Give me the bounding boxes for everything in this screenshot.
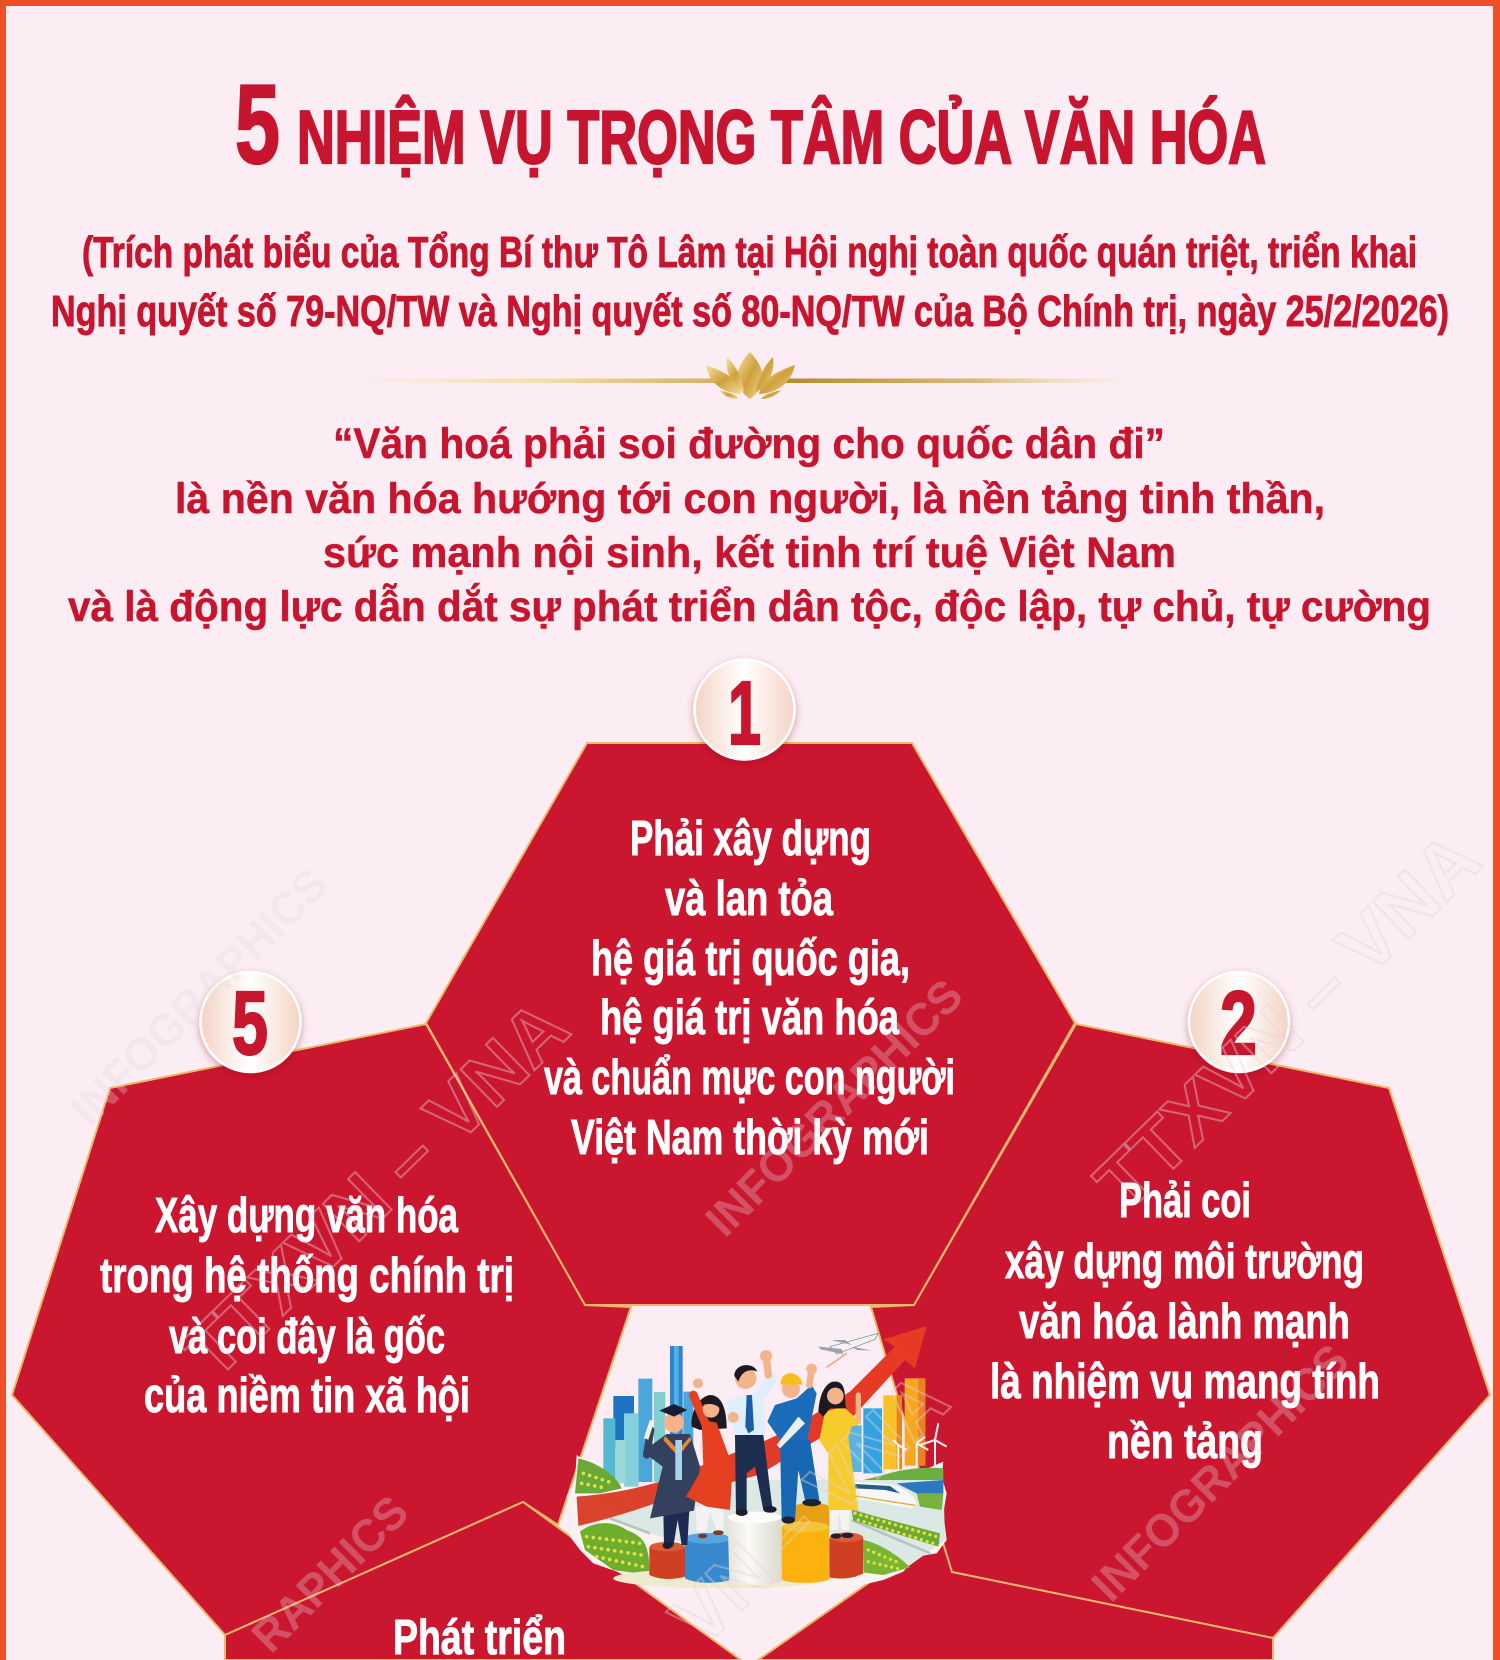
rising red arrow bbox=[577, 1326, 927, 1526]
watermarks: INFOGRAPHICS bbox=[1081, 1334, 1358, 1611]
watermarks: INFOGRAPHICS bbox=[60, 858, 337, 1135]
quote text: và là động lực dẫn dắt sự phát triển dân tộc, độc lập, tự chủ, tự cường bbox=[68, 582, 1431, 631]
task 2 text bbox=[990, 1174, 1380, 1469]
badge: number 1 bbox=[694, 660, 794, 764]
task 1 text: Việt Nam thời kỳ mới bbox=[571, 1111, 929, 1165]
quote text: là nền văn hóa hướng tới con người, là nền tảng tinh thần, bbox=[175, 475, 1325, 523]
task 1 text: hệ giá trị quốc gia, bbox=[591, 932, 910, 986]
panel: task 4 bbox=[225, 1502, 741, 1660]
task 2 text: nền tảng bbox=[1107, 1415, 1263, 1469]
bar chart towers bbox=[883, 1378, 925, 1469]
badge: number 2: 2 bbox=[1220, 974, 1257, 1074]
watermarks: TTXVN – VNA bbox=[1080, 816, 1497, 1226]
task 5 text: Xây dựng văn hóa bbox=[155, 1189, 459, 1243]
quote text: “Văn hoá phải soi đường cho quốc dân đi” bbox=[333, 420, 1165, 468]
task 1 text: Phải xây dựng bbox=[630, 812, 871, 866]
panel: task 1 bbox=[426, 743, 1075, 1305]
illustration: people celebrating on podium bbox=[567, 1326, 947, 1590]
title: 5 bbox=[235, 62, 280, 187]
person: graduate bbox=[643, 1404, 700, 1549]
watermarks bbox=[60, 816, 1497, 1660]
task 5 text: của niềm tin xã hội bbox=[144, 1369, 470, 1423]
badge: number 1: 1 bbox=[728, 664, 761, 764]
city skyline bbox=[603, 1346, 882, 1487]
watermarks: INFOGRAPHICS bbox=[695, 969, 972, 1246]
panel: task 5 bbox=[12, 1024, 631, 1635]
person: man in white shirt bbox=[728, 1350, 777, 1516]
title bbox=[235, 62, 1266, 187]
task 2 text: Phải coi bbox=[1119, 1174, 1251, 1228]
badge: number 2 bbox=[1189, 972, 1289, 1074]
task 1 text: và chuẩn mực con người bbox=[544, 1051, 955, 1105]
person: woman in red ao dai bbox=[686, 1378, 733, 1538]
task 1 text: hệ giá trị văn hóa bbox=[600, 991, 900, 1045]
task 1 text: và lan tỏa bbox=[665, 872, 834, 926]
green bushes bbox=[575, 1458, 943, 1575]
subtitle bbox=[51, 228, 1449, 336]
watermarks: RAPHICS bbox=[241, 1485, 418, 1660]
panel: task 3 bbox=[758, 1533, 1273, 1660]
task 1 text bbox=[544, 812, 955, 1165]
illustration base bbox=[567, 1455, 947, 1590]
task 2 text: xây dựng môi trường bbox=[1005, 1235, 1364, 1289]
quote text: sức mạnh nội sinh, kết tinh trí tuệ Việt Nam bbox=[323, 529, 1176, 577]
task 5 text bbox=[100, 1189, 514, 1423]
panel: task 2 bbox=[871, 1024, 1490, 1638]
badge: number 5: 5 bbox=[232, 974, 268, 1074]
watermarks: TTXVN – VNA bbox=[168, 984, 585, 1394]
badge: number 5 bbox=[200, 972, 300, 1074]
train bbox=[855, 1480, 943, 1508]
task 2 text: văn hóa lành mạnh bbox=[1019, 1295, 1350, 1349]
quote text bbox=[68, 420, 1431, 631]
task 5 text: trong hệ thống chính trị bbox=[100, 1249, 514, 1303]
person: woman in yellow ao dai bbox=[818, 1382, 862, 1539]
watermarks: VN – VNA bbox=[655, 1357, 964, 1660]
podium bbox=[613, 1503, 863, 1588]
wind turbines bbox=[893, 1423, 947, 1477]
person: worker with helmet bbox=[767, 1364, 821, 1524]
task 5 text: và coi đây là gốc bbox=[169, 1310, 445, 1364]
airplane bbox=[818, 1333, 878, 1367]
divider with golden lotus bbox=[344, 352, 1138, 399]
task 2 text: là nhiệm vụ mang tính bbox=[990, 1355, 1380, 1409]
